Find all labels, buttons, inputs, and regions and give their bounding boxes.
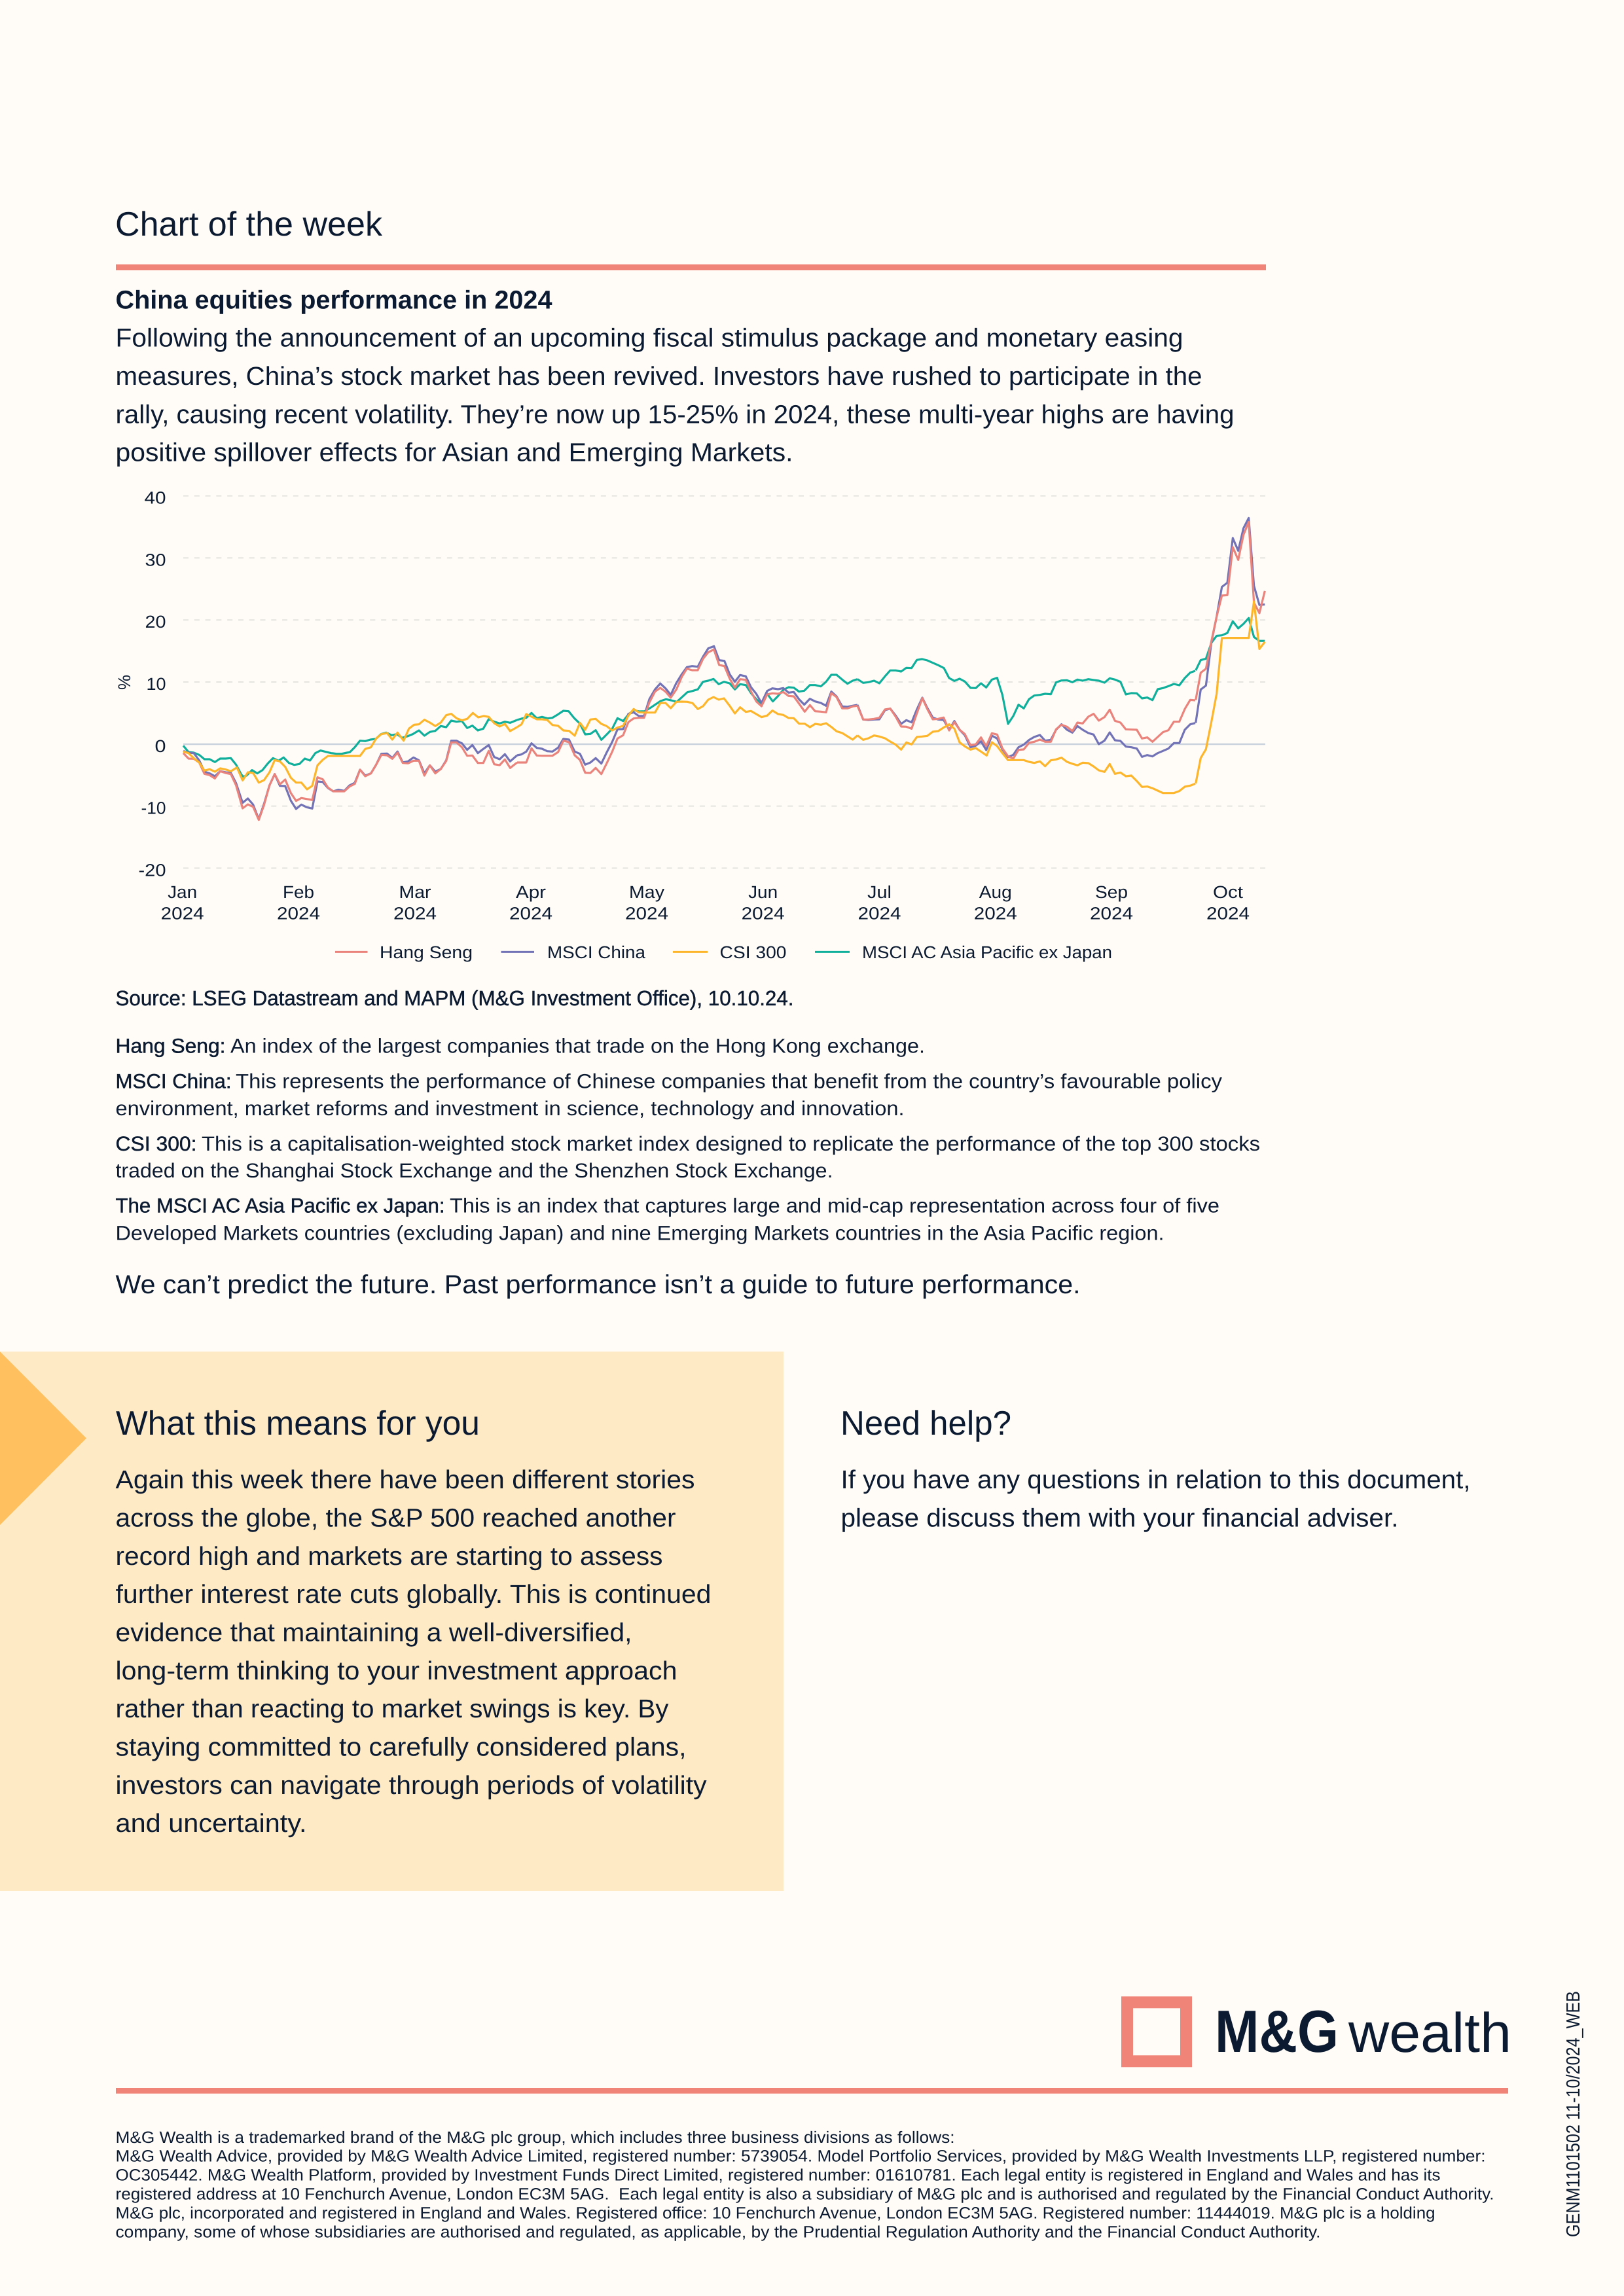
y axis labels: -20 (139, 860, 166, 880)
index definitions: This is a capitalisation-weighted stock market index designed to replicate the performance of the top 300 stocks (202, 1132, 1260, 1155)
chart legend: MSCI AC Asia Pacific ex Japan (862, 942, 1112, 962)
x axis labels: Feb (283, 882, 314, 902)
need help body text (840, 1465, 1470, 1533)
y axis labels: 10 (147, 674, 166, 694)
x axis labels: 2024 (974, 903, 1017, 923)
x axis labels: Aug (979, 882, 1012, 902)
series: MSCI AC Asia Pacific ex Japan (183, 618, 1265, 777)
panel: what this means for you (0, 1352, 784, 1891)
y axis labels: 20 (145, 612, 166, 632)
x axis labels: May (629, 882, 665, 902)
subheading: China equities performance in 2024: China equities performance in 2024 (115, 285, 552, 314)
x axis labels: 2024 (742, 903, 785, 923)
x axis labels: Apr (516, 882, 546, 902)
x axis labels: Jan (168, 882, 197, 902)
index definitions: This is an index that captures large and mid-cap representation across four of five (450, 1194, 1219, 1217)
x axis labels: 2024 (393, 903, 437, 923)
footer legal text: registered address at 10 Fenchurch Avenue, London EC3M 5AG. Each legal entity is also a subsidiary of M&G plc and is authorised and regulated by the Financial Conduct Authority. (115, 2185, 1494, 2204)
panel heading: What this means for you (116, 1405, 480, 1443)
intro text block: measures, China’s stock market has been revived. Investors have rushed to participate in the (115, 362, 1202, 391)
intro text block: Following the announcement of an upcoming fiscal stimulus package and monetary easing (115, 323, 1183, 352)
y axis labels (139, 488, 166, 880)
line chart: China equities performance (115, 488, 1265, 923)
series: CSI 300 (183, 601, 1265, 793)
x axis labels: Sep (1095, 882, 1128, 902)
panel body text: rather than reacting to market swings is key. By (115, 1695, 669, 1723)
index definitions: MSCI China: (115, 1070, 232, 1093)
logo: M&G wealth: M&G (1215, 1999, 1339, 2065)
y axis labels: 30 (145, 550, 166, 569)
x axis labels: 2024 (277, 903, 320, 923)
heading: Chart of the week: Chart of the week (115, 206, 383, 243)
panel: need help (840, 1405, 1470, 1533)
index definitions: environment, market reforms and investment in science, technology and innovation. (115, 1097, 905, 1120)
panel body text: long-term thinking to your investment approach (115, 1657, 677, 1685)
x axis labels: 2024 (1206, 903, 1250, 923)
intro text block (115, 323, 1235, 467)
chart legend: MSCI China (547, 942, 645, 962)
index definitions (115, 1035, 1260, 1245)
panel body text: and uncertainty. (115, 1809, 306, 1838)
intro text block: positive spillover effects for Asian and Emerging Markets. (115, 438, 793, 467)
series: Hang Seng (183, 522, 1265, 820)
x axis labels (161, 882, 1250, 923)
y axis title: % (115, 675, 134, 690)
y axis labels: -10 (141, 798, 166, 818)
disclaimer line: We can’t predict the future. Past performance isn’t a guide to future performance. (115, 1270, 1080, 1299)
intro text block: rally, causing recent volatility. They’re now up 15-25% in 2024, these multi-year highs are having (115, 401, 1235, 429)
need help heading: Need help? (840, 1405, 1011, 1443)
panel body text: across the globe, the S&P 500 reached another (115, 1504, 676, 1533)
x axis labels: 2024 (1090, 903, 1133, 923)
source note: Source: LSEG Datastream and MAPM (M&G Investment Office), 10.10.24. (115, 986, 793, 1010)
panel body text: record high and markets are starting to assess (115, 1542, 663, 1571)
panel body text: further interest rate cuts globally. This is continued (115, 1580, 711, 1609)
index definitions: Developed Markets countries (excluding Japan) and nine Emerging Markets countries in the Asia Pacific region. (115, 1221, 1164, 1245)
icon: arrow (0, 1352, 86, 1525)
index definitions: traded on the Shanghai Stock Exchange and the Shenzhen Stock Exchange. (115, 1159, 833, 1182)
index definitions: Hang Seng: (115, 1035, 225, 1058)
panel body text: Again this week there have been different stories (115, 1465, 695, 1494)
need help body text: please discuss them with your financial adviser. (840, 1504, 1398, 1533)
chart legend (335, 942, 1112, 962)
series: MSCI China (183, 518, 1265, 819)
y axis labels: 0 (154, 736, 166, 756)
footer legal text: company, some of whose subsidiaries are authorised and regulated, as applicable, by the Prudential Regulation Authority and the Financial Conduct Authority. (115, 2223, 1321, 2242)
panel body text: staying committed to carefully considered plans, (115, 1733, 686, 1762)
footer legal text: M&G plc, incorporated and registered in England and Wales. Registered office: 10 Fenchurch Avenue, London EC3M 5AG. Registered number: 11444019. M&G plc is a holding (115, 2204, 1435, 2223)
x axis labels: 2024 (161, 903, 204, 923)
index definitions: An index of the largest companies that trade on the Hong Kong exchange. (230, 1035, 925, 1058)
chart legend: Hang Seng (380, 942, 473, 962)
index definitions: CSI 300: (115, 1132, 196, 1155)
footer legal text: OC305442. M&G Wealth Platform, provided by Investment Funds Direct Limited, registered number: 01610781. Each legal entity is registered in England and Wales and has its (115, 2166, 1440, 2185)
x axis labels: Jul (867, 882, 892, 902)
logo: M&G wealth (1127, 1999, 1511, 2065)
x axis labels: 2024 (857, 903, 901, 923)
footer legal text: M&G Wealth Advice, provided by M&G Wealth Advice Limited, registered number: 5739054. Model Portfolio Services, provided by M&G Wealth Investments LLP, registered number: (115, 2147, 1486, 2166)
x axis labels: Oct (1213, 882, 1244, 902)
chart legend: CSI 300 (720, 942, 787, 962)
index definitions: The MSCI AC Asia Pacific ex Japan: (115, 1194, 445, 1217)
logo: M&G wealth: wealth (1348, 2002, 1511, 2064)
x axis labels: 2024 (625, 903, 668, 923)
panel body text (115, 1465, 711, 1838)
y axis labels: 40 (144, 488, 166, 508)
x axis labels: Mar (399, 882, 431, 902)
panel body text: investors can navigate through periods of volatility (115, 1771, 707, 1800)
need help body text: If you have any questions in relation to this document, (840, 1465, 1470, 1494)
panel body text: evidence that maintaining a well-diversified, (115, 1618, 632, 1647)
index definitions: This represents the performance of Chinese companies that benefit from the country’s favourable policy (236, 1070, 1223, 1093)
x axis labels: 2024 (509, 903, 552, 923)
document reference (vertical): GENM1101502 11-10/2024_WEB (1563, 1991, 1584, 2237)
footer legal text (115, 2128, 1494, 2242)
x axis labels: Jun (748, 882, 778, 902)
footer legal text: M&G Wealth is a trademarked brand of the M&G plc group, which includes three business divisions as follows: (115, 2128, 954, 2147)
